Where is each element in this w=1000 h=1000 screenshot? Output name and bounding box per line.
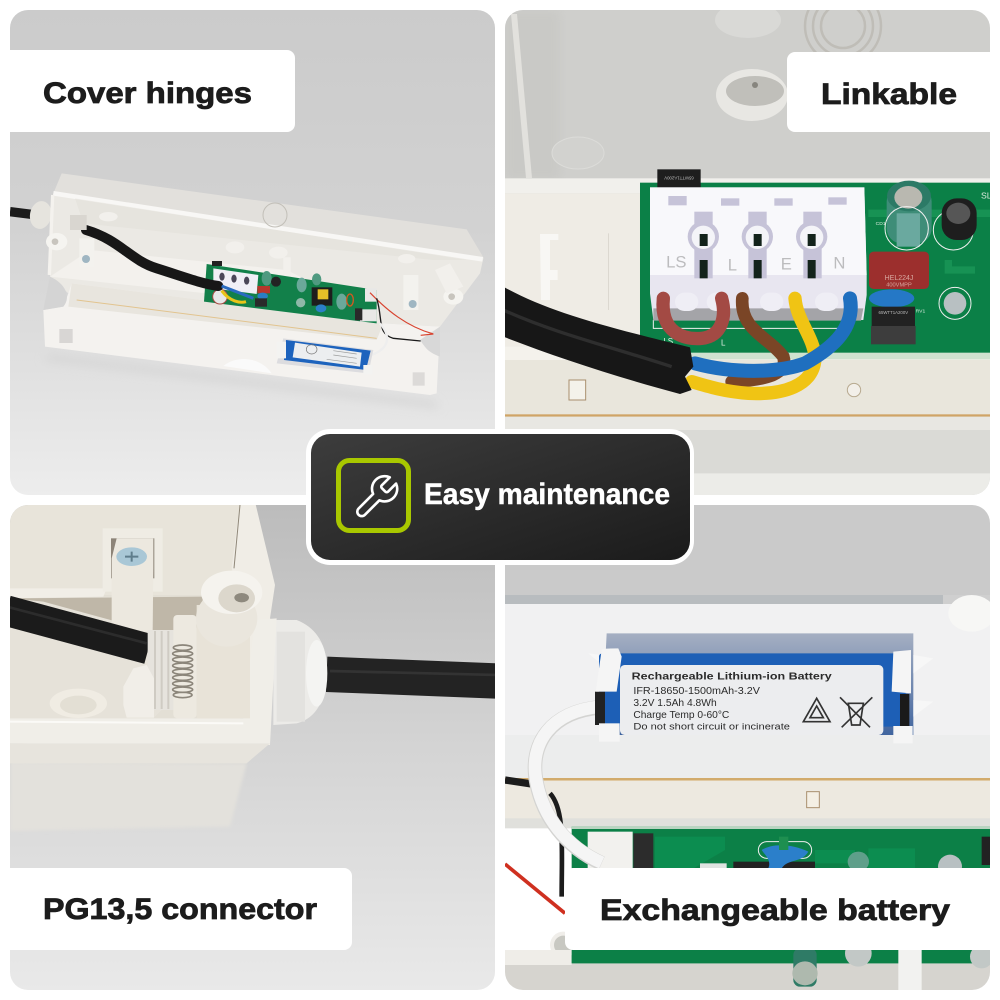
battery: Charge Temp 0-60°C xyxy=(633,710,729,721)
panel: linkable: RV1 xyxy=(916,309,925,315)
battery: Do not short circuit or incinerate xyxy=(633,722,790,732)
cover xyxy=(505,604,990,735)
battery: 3.2V 1.5Ah 4.8Wh xyxy=(633,698,717,709)
connector block: E xyxy=(781,254,792,273)
panel: PG13,5 connector xyxy=(7,502,497,990)
connector block xyxy=(650,187,867,321)
battery xyxy=(277,338,373,373)
battery: IFR-18650-1500mAh-3.2V xyxy=(633,686,761,697)
PCB xyxy=(572,827,990,963)
threaded gland xyxy=(148,630,174,710)
knockout rings xyxy=(804,10,882,52)
external cable xyxy=(327,674,497,681)
knockout outline xyxy=(552,137,604,169)
panel: exchangeable battery xyxy=(505,505,995,993)
panel: linkable: LS xyxy=(663,337,673,346)
PCB xyxy=(204,264,377,323)
label: Linkable xyxy=(787,52,990,132)
label: Cover hinges xyxy=(10,50,295,132)
spring xyxy=(173,645,193,698)
conductors xyxy=(663,298,851,394)
connector xyxy=(588,832,653,869)
panel: linkable: CD1 xyxy=(876,221,886,227)
icon: wrench xyxy=(338,460,408,530)
label: PG13,5 connector: PG13,5 connector xyxy=(43,893,317,926)
gland nut xyxy=(273,620,327,725)
panel: cover hinges xyxy=(10,10,495,495)
black fuse on top: 65WTT1A200V xyxy=(664,176,694,181)
label: Cover hinges: Cover hinges xyxy=(43,77,252,110)
icon: recycling xyxy=(803,698,830,722)
connector block: LS xyxy=(666,252,687,271)
black fuse on top xyxy=(657,169,701,188)
panel: linkable: HEL224J xyxy=(885,275,913,282)
battery clips xyxy=(596,648,913,743)
battery xyxy=(595,653,909,735)
hinge post xyxy=(196,571,262,718)
PCB xyxy=(640,183,990,353)
label: Exchangeable battery: Exchangeable battery xyxy=(600,894,950,927)
central badge: easy maintenance xyxy=(306,429,694,565)
battery: Rechargeable Lithium-ion Battery xyxy=(632,671,832,682)
strip xyxy=(505,778,990,781)
cable entry ring xyxy=(716,69,788,121)
panel: linkable xyxy=(503,0,992,497)
boss xyxy=(50,689,107,718)
screw post xyxy=(103,528,163,632)
clip xyxy=(123,665,154,718)
strip xyxy=(505,350,990,360)
left wall strip xyxy=(511,14,532,178)
panel: linkable: L xyxy=(721,338,726,347)
label: Linkable: Linkable xyxy=(821,78,957,111)
battery recess xyxy=(606,633,914,735)
connector block: L xyxy=(728,256,737,275)
internal cable xyxy=(7,611,148,649)
black cable xyxy=(503,287,693,394)
capacitors xyxy=(885,181,932,250)
housing xyxy=(10,505,240,595)
wires xyxy=(505,780,532,784)
label: Exchangeable battery xyxy=(565,868,990,950)
housing floor xyxy=(505,178,990,193)
bottom housing xyxy=(505,963,990,993)
cable and conductors xyxy=(86,230,218,286)
panel: linkable: 65WTT1A200V xyxy=(879,310,908,315)
lamp opened with hinged cover xyxy=(10,173,484,408)
icon: crossed-out bin xyxy=(840,697,872,727)
connector block: N xyxy=(833,254,845,273)
panel: linkable: SL xyxy=(981,190,992,200)
heading: easy maintenance: Easy maintenance xyxy=(424,478,670,511)
capacitor blue xyxy=(758,837,812,868)
label: PG13,5 connector xyxy=(10,868,352,950)
panel: linkable: 400VMPP xyxy=(886,283,912,289)
